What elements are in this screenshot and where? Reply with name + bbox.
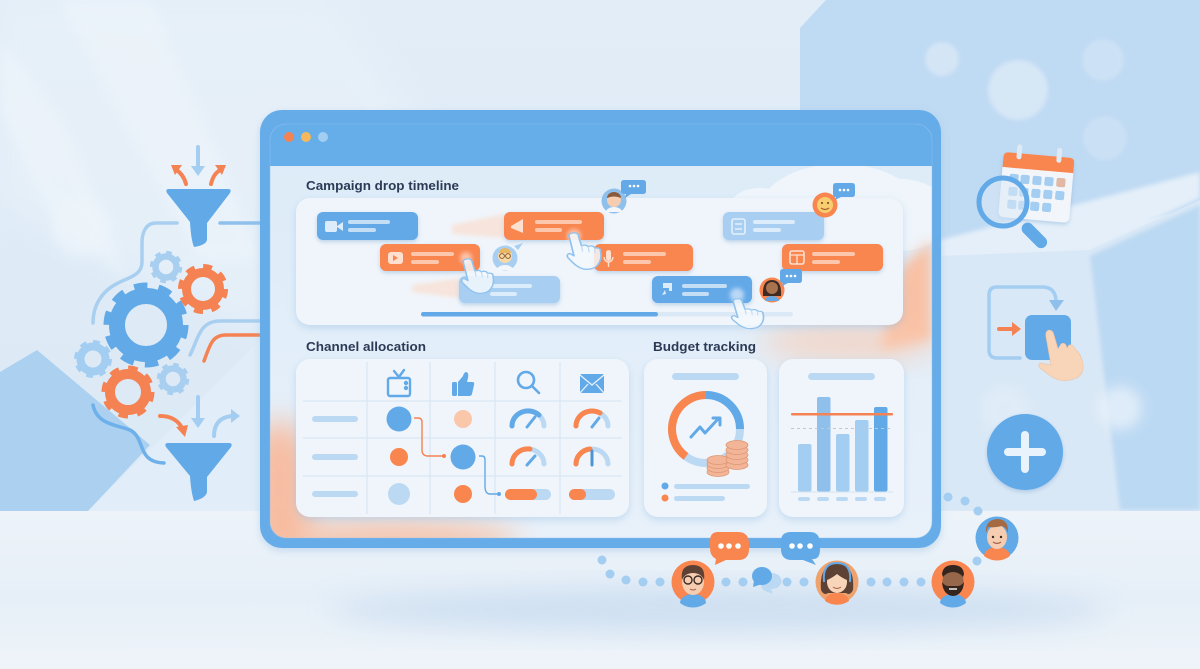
gauge row1 col4 bbox=[576, 411, 608, 427]
window body bbox=[270, 124, 932, 538]
avatar: man with speech bubble bbox=[602, 180, 646, 214]
icon: thumbs up bbox=[452, 372, 474, 396]
icon: add button bbox=[987, 414, 1063, 490]
target line bbox=[791, 413, 893, 416]
icon: magnifier bbox=[518, 372, 539, 393]
icon: bottom funnel with arrows bbox=[160, 397, 240, 501]
avatar: bearded man bbox=[932, 560, 974, 608]
icon: trend arrow bbox=[691, 418, 720, 437]
icon: gears bbox=[76, 252, 226, 416]
progress pills bbox=[505, 489, 615, 500]
gear: pale lower bbox=[158, 364, 188, 394]
panel: channel allocation table bbox=[296, 359, 629, 517]
calendar bbox=[998, 143, 1075, 223]
chip: megaphone orange bbox=[504, 212, 604, 240]
hand bbox=[1039, 330, 1083, 381]
icon: coins bbox=[707, 440, 748, 476]
app window bbox=[246, 110, 950, 560]
chip: calendar orange bbox=[782, 244, 883, 271]
heading: channel allocation: Channel allocation bbox=[306, 339, 426, 354]
avatar: young man bbox=[976, 516, 1018, 561]
chip: microphone orange bbox=[594, 244, 693, 271]
gauge row2 col4 bbox=[576, 449, 608, 465]
avatar: smiling yellow face with bubble bbox=[812, 183, 855, 218]
icon: envelope bbox=[580, 374, 604, 393]
panel: budget donut bbox=[644, 359, 767, 517]
avatar: man with glasses bbox=[672, 560, 714, 608]
heading: timeline: Campaign drop timeline bbox=[306, 178, 459, 193]
gear: large blue bbox=[108, 287, 184, 363]
avatar: glasses person bbox=[492, 243, 523, 270]
bars bbox=[798, 397, 888, 492]
axis labels bbox=[798, 497, 886, 501]
connector: blue bbox=[479, 456, 501, 496]
tap glows bbox=[460, 229, 744, 302]
gear: pale upper bbox=[152, 252, 180, 282]
panel: campaign timeline bbox=[296, 198, 903, 329]
gear: pale left bbox=[76, 342, 110, 376]
chip: video blue bbox=[317, 212, 418, 240]
avatar: woman with bubble bbox=[760, 269, 802, 302]
hand cursor 1 bbox=[462, 259, 494, 293]
icon: tv bbox=[388, 370, 410, 396]
chip: pale third row bbox=[459, 276, 560, 303]
connecting dots bbox=[598, 492, 982, 586]
chip: blue third row bbox=[652, 276, 752, 303]
donut chart bbox=[672, 395, 740, 463]
row labels bbox=[312, 416, 358, 497]
window controls bbox=[284, 132, 328, 142]
chip: play orange bbox=[380, 244, 480, 271]
progress bar bbox=[421, 312, 793, 316]
legend bbox=[662, 482, 750, 502]
icon: top funnel with arrows bbox=[166, 147, 231, 247]
allocation dots bbox=[386, 406, 476, 505]
motion trail bbox=[412, 214, 504, 298]
panel: budget bar chart bbox=[779, 359, 904, 517]
left connector lines bbox=[93, 223, 262, 463]
gauge row1 col3 bbox=[512, 411, 544, 427]
gear: orange upper bbox=[180, 266, 226, 312]
magnifier bbox=[979, 178, 1050, 251]
icon: calendar with magnifier bbox=[979, 143, 1075, 251]
heading: budget tracking: Budget tracking bbox=[653, 339, 756, 354]
gauge row2 col3 bbox=[512, 449, 544, 465]
connector: orange bbox=[414, 418, 446, 458]
gauges bbox=[512, 411, 608, 465]
gear: orange lower bbox=[104, 368, 152, 416]
avatar: woman with headset bbox=[816, 560, 858, 605]
chip: news pale bbox=[723, 212, 824, 240]
speech bubble: small chat bbox=[752, 567, 782, 594]
hand cursor 2 bbox=[567, 233, 601, 269]
speech bubble: blue bbox=[781, 532, 820, 565]
icon: drag into frame with hand bbox=[989, 287, 1083, 381]
speech bubble: orange bbox=[710, 532, 749, 565]
hand cursor 3 bbox=[732, 299, 764, 329]
